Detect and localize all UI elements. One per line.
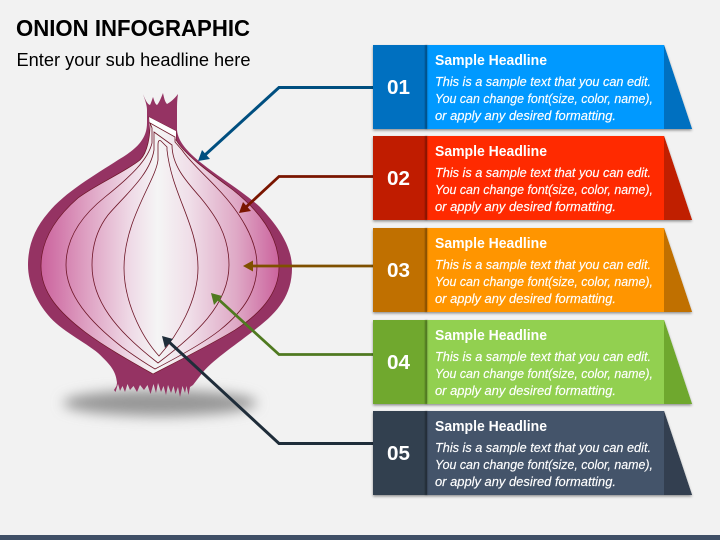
arrow 05 — [162, 336, 373, 444]
card 05 text: or apply any desired formatting. — [435, 475, 616, 489]
number 04: 04 — [387, 351, 411, 374]
card 05 text: This is a sample text that you can edit. — [435, 441, 651, 455]
card 03 text — [435, 258, 653, 306]
card 03 text: This is a sample text that you can edit. — [435, 258, 651, 272]
onion centre layer — [124, 140, 198, 356]
arrow 04 — [211, 293, 373, 354]
onion layer 2 — [66, 123, 257, 369]
arrow 02 — [239, 176, 373, 213]
panel: card 03 — [373, 228, 692, 312]
number 03: 03 — [387, 259, 410, 282]
card 04 text: This is a sample text that you can edit. — [435, 350, 651, 364]
panel: card 04 — [373, 320, 692, 404]
card 04 text: or apply any desired formatting. — [435, 384, 616, 398]
onion outer skin — [28, 93, 292, 397]
card 05 heading: Sample Headline — [435, 419, 547, 435]
card 02 text: or apply any desired formatting. — [435, 200, 616, 214]
number 01: 01 — [387, 76, 410, 99]
card 03 text: You can change font(size, color, name), — [435, 275, 653, 289]
card 04 text — [435, 350, 653, 398]
card 01 text: This is a sample text that you can edit. — [435, 75, 651, 89]
onion illustration — [28, 93, 292, 416]
onion ground shadow — [63, 390, 257, 416]
card 02 heading: Sample Headline — [435, 144, 547, 160]
card 02 text: You can change font(size, color, name), — [435, 183, 653, 197]
card 01 text: or apply any desired formatting. — [435, 109, 616, 123]
panel: card 02 — [373, 136, 692, 220]
number 02: 02 — [387, 167, 410, 190]
title: ONION INFOGRAPHIC — [16, 15, 250, 41]
white top band — [149, 117, 176, 140]
card 02 text — [435, 166, 653, 214]
arrow 01 — [198, 88, 373, 161]
footer bar — [0, 535, 720, 540]
card 03 text: or apply any desired formatting. — [435, 292, 616, 306]
number 05: 05 — [387, 442, 410, 465]
onion inner flesh — [41, 117, 279, 374]
card 04 heading: Sample Headline — [435, 328, 547, 344]
card 01 text — [435, 75, 653, 123]
arrow 03 — [243, 260, 373, 272]
card 05 text — [435, 441, 653, 489]
card 05 text: You can change font(size, color, name), — [435, 458, 653, 472]
card 01 heading: Sample Headline — [435, 53, 547, 69]
card 01 text: You can change font(size, color, name), — [435, 92, 653, 106]
card 03 heading: Sample Headline — [435, 236, 547, 252]
subtitle: Enter your sub headline here — [16, 50, 250, 70]
panel: card 05 — [373, 411, 692, 495]
onion layer 3 — [92, 132, 229, 363]
card 04 text: You can change font(size, color, name), — [435, 367, 653, 381]
card 02 text: This is a sample text that you can edit. — [435, 166, 651, 180]
panel: card 01 — [373, 45, 692, 129]
